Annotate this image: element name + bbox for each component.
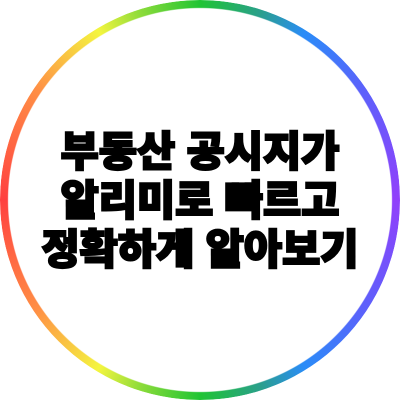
- title line 3: 정확하게 알아보기: [42, 226, 358, 273]
- title: [41, 128, 358, 273]
- title line 1: 부동산 공시지가: [61, 128, 339, 175]
- title line 2: 알리미로 빠르고: [61, 177, 339, 224]
